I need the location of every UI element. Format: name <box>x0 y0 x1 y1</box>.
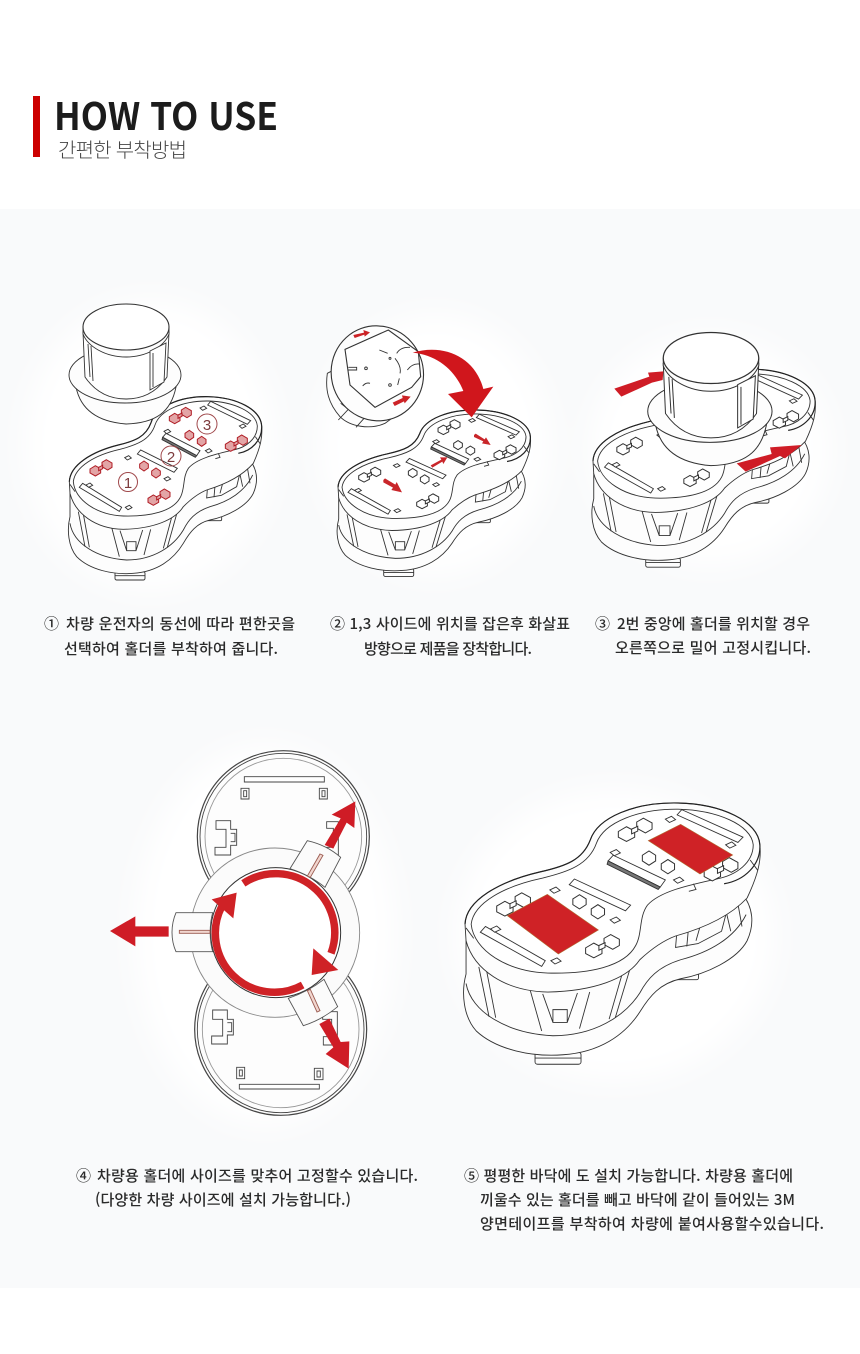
holder body <box>68 397 262 580</box>
caption 5 <box>464 1165 824 1234</box>
figure 1: holder with cup and numbered spots <box>68 304 262 580</box>
caption 3: 2번 중앙에 홀더를 위치할 경우 <box>617 613 810 634</box>
caption 4 <box>76 1165 418 1210</box>
caption 1: 차량 운전자의 동선에 따라 편한곳을 <box>66 613 295 634</box>
arrows <box>614 371 802 472</box>
number 3: 3 <box>203 417 211 434</box>
photo glows behind illustrations <box>25 300 830 1125</box>
arrow: rotating ring lower <box>212 893 303 992</box>
caption 3: ③ <box>595 613 610 634</box>
figure 4: top view with expanding arms <box>110 751 369 1115</box>
number 2: 2 <box>167 449 175 466</box>
caption 1: 선택하여 홀더를 부착하여 줍니다. <box>64 638 278 659</box>
title: HOW TO USE <box>54 86 278 141</box>
center ring <box>190 848 360 1017</box>
caption 4: 차량용 홀더에 사이즈를 맞추어 고정할수 있습니다. <box>97 1165 418 1186</box>
icon: cup <box>648 332 772 466</box>
arrow: center <box>431 457 447 468</box>
title accent bar <box>33 96 40 157</box>
arm: lower right <box>288 979 338 1026</box>
icon: flipped cap <box>318 313 437 434</box>
caption 2 <box>330 613 570 659</box>
arrow: big curved <box>413 350 493 417</box>
caption 5: ⑤ 평평한 바닥에 도 설치 가능합니다. 차량용 홀더에 <box>464 1165 793 1186</box>
arrow: left <box>110 916 169 946</box>
arrow: rotating ring upper <box>243 874 338 975</box>
caption 1 <box>44 613 295 659</box>
number 2 <box>161 446 181 466</box>
arm: left <box>172 913 213 952</box>
caption 5: 끼울수 있는 홀더를 빼고 바닥에 같이 들어있는 3M <box>480 1189 795 1210</box>
number 1 <box>118 472 138 492</box>
arrow: left lobe <box>383 478 402 492</box>
caption 4: (다양한 차량 사이즈에 설치 가능합니다.) <box>95 1189 351 1210</box>
figure 5: holder with adhesive pads <box>464 803 760 1064</box>
subtitle: 간편한 부착방법 <box>58 134 187 163</box>
caption 4: ④ <box>76 1165 91 1186</box>
arm: upper right <box>290 841 341 887</box>
panel: light background <box>0 209 860 1288</box>
pad: left <box>507 894 598 954</box>
arrow: cap red bottom <box>393 395 411 406</box>
arrow: upper <box>614 371 663 397</box>
number 3 <box>197 414 217 434</box>
caption 1: ① <box>44 613 59 634</box>
arrow: lower right <box>319 1019 349 1069</box>
figure 2: cap being placed on holder <box>318 313 531 577</box>
caption 2: 방향으로 제품을 장착합니다. <box>364 638 532 659</box>
caption 3: 오른쪽으로 밀어 고정시킵니다. <box>615 637 811 658</box>
pad: right <box>648 824 733 874</box>
bottom circle <box>195 943 367 1115</box>
arrow: upper right <box>325 801 355 849</box>
adhesive pads <box>507 824 733 954</box>
figure 3: holder with cup in center <box>592 332 815 567</box>
top circle <box>197 751 369 923</box>
caption 2: ② 1,3 사이드에 위치를 잡은후 화살표 <box>330 613 570 634</box>
arrow: right lobe <box>474 434 491 445</box>
arrow: cap red top <box>353 330 370 338</box>
number 1: 1 <box>124 475 132 492</box>
caption 3 <box>595 613 811 658</box>
holder body <box>337 410 531 577</box>
holder body <box>464 803 760 1064</box>
arrow: lower <box>737 445 802 472</box>
cap and arrows <box>318 313 493 492</box>
holder body <box>592 369 815 567</box>
icon: cup <box>69 304 181 424</box>
caption 5: 양면테이프를 부착하여 차량에 붙여사용할수있습니다. <box>480 1213 824 1234</box>
